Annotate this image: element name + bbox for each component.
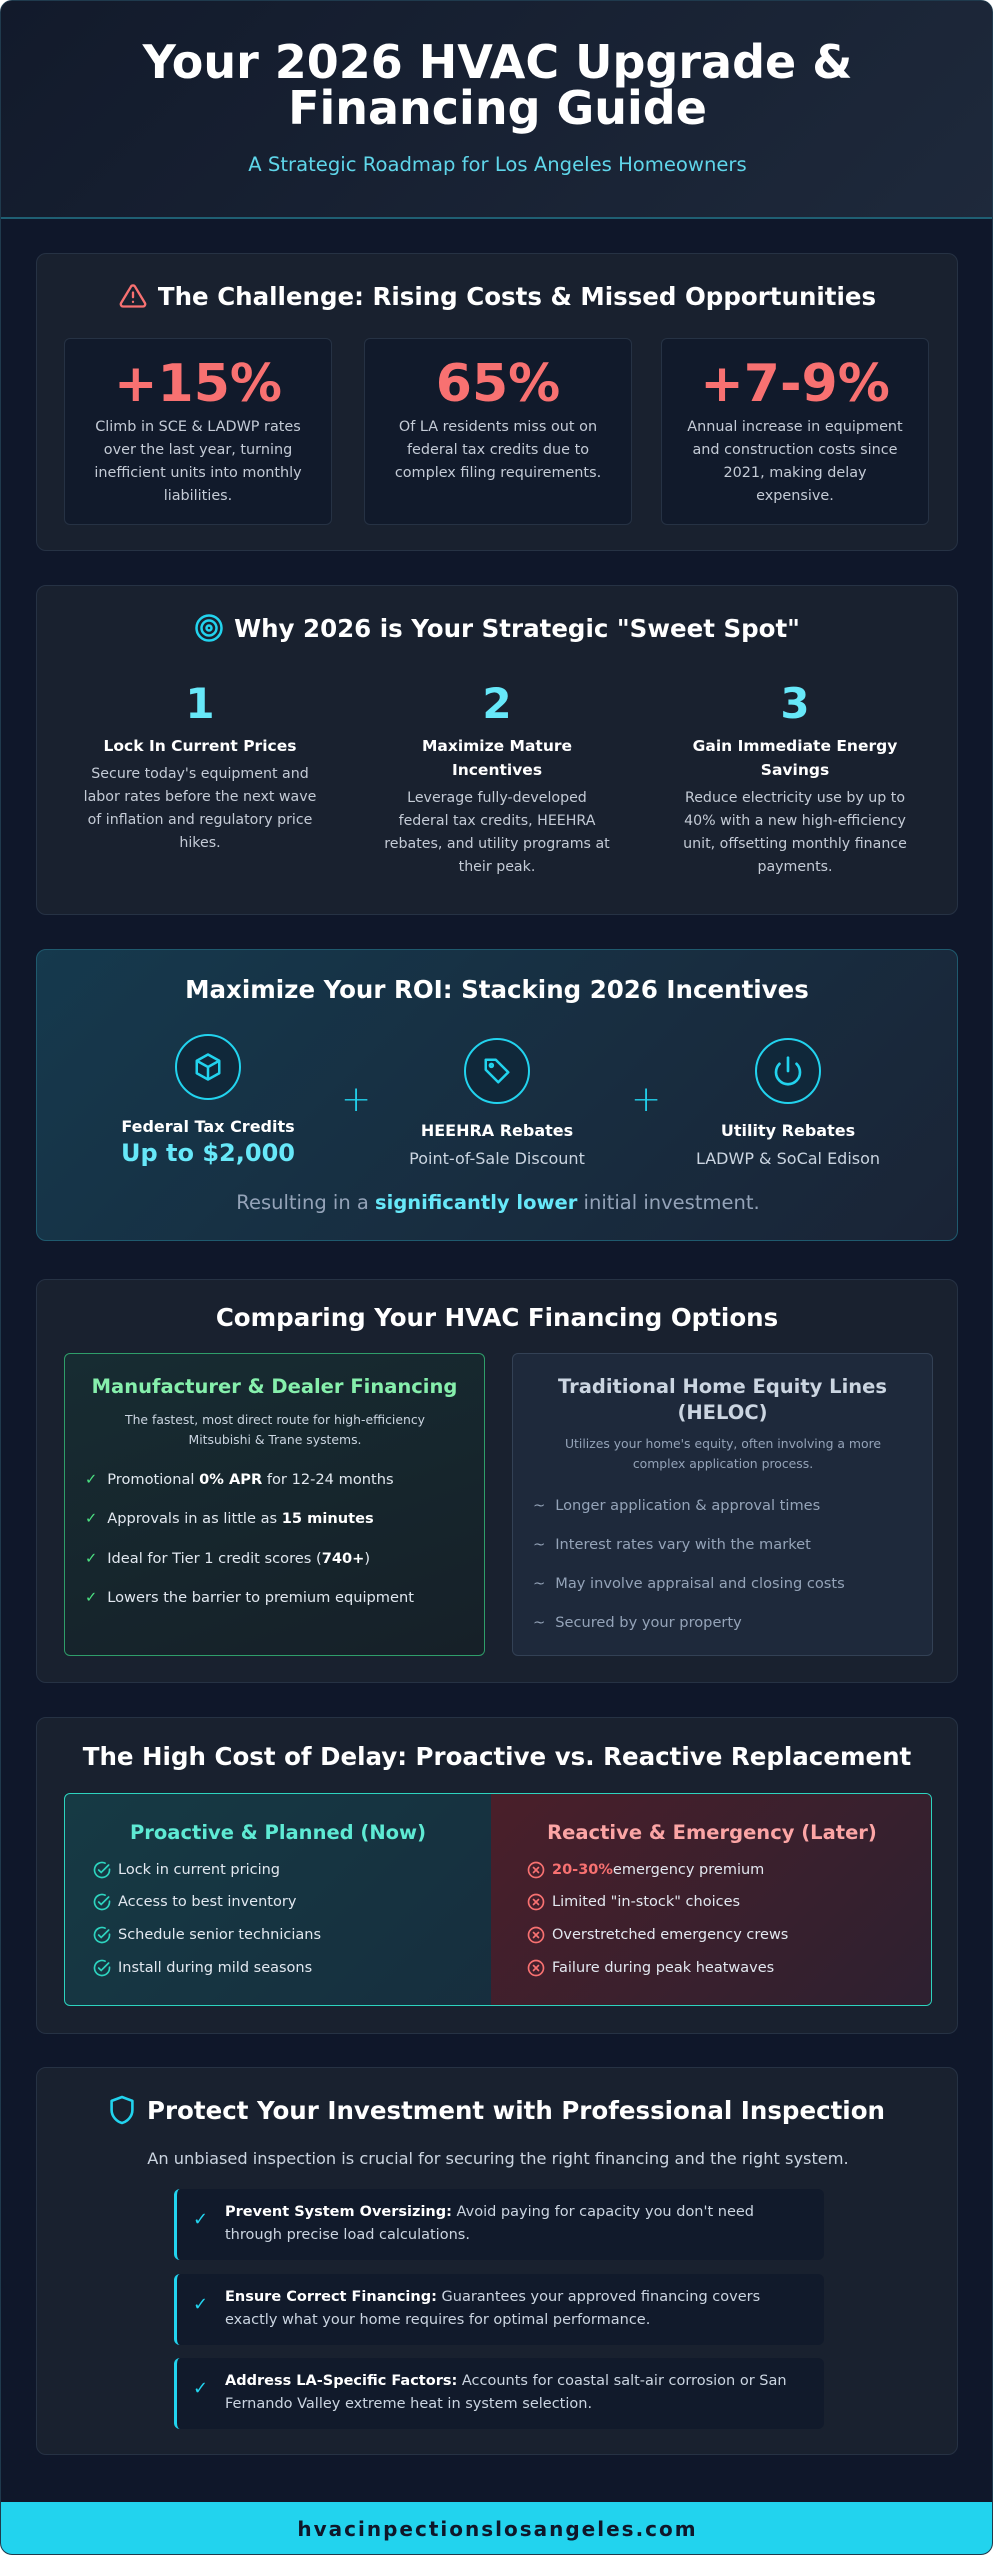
panel: financing options [36, 1279, 958, 1683]
incentive: utility: Utility Rebates [721, 1121, 855, 1140]
card: HELOC: ~ Secured by your property [533, 1614, 742, 1631]
heading: challenge: The Challenge: Rising Costs & Missed Opportunities [158, 282, 876, 311]
stat: +7-9%: +7-9% [700, 354, 890, 414]
item: LA factors: ✓ [193, 2378, 208, 2399]
item: oversizing: ✓ [193, 2209, 208, 2230]
incentive: HEEHRA: HEEHRA Rebates [421, 1121, 573, 1140]
title: Financing Guide [288, 81, 707, 135]
stat: +15%: Climb in SCE & LADWP rates over the last year, turning inefficient units into monthly liabilities. [94, 419, 302, 504]
reason 1: Lock In Current Prices [104, 737, 296, 755]
footer: hvacinpectionslosangeles.com [297, 2517, 698, 2541]
comparison box: Lock in current pricing [118, 1862, 280, 1878]
stat: 65%: 65% [436, 354, 560, 414]
comparison box [64, 1793, 932, 2006]
title [142, 35, 852, 135]
comparison box: Schedule senior technicians [118, 1927, 321, 1943]
card: dealer financing: ✓ Approvals in as little as 15 minutes [85, 1510, 374, 1527]
heading: delay: The High Cost of Delay: Proactive vs. Reactive Replacement [83, 1742, 911, 1771]
reason 2: Maximize Mature [422, 737, 572, 755]
subtitle: A Strategic Roadmap for Los Angeles Homeowners [248, 153, 747, 176]
stat: +7-9% [661, 338, 929, 525]
stat: +7-9%: Annual increase in equipment and construction costs since 2021, making delay expensive. [687, 419, 903, 504]
incentive: HEEHRA: Point-of-Sale Discount [409, 1149, 585, 1168]
item: financing: Ensure Correct Financing: Guarantees your approved financing covers exactly what your home requires for optimal performance. [225, 2289, 760, 2328]
item: financing: ✓ [193, 2294, 208, 2315]
header [1, 1, 994, 219]
item: oversizing: Prevent System Oversizing: Avoid paying for capacity you don't need through precise load calculations. [225, 2204, 754, 2243]
stat: 65% [364, 338, 632, 525]
item: oversizing [174, 2189, 824, 2260]
item: LA factors: Address LA-Specific Factors: Accounts for coastal salt-air corrosion or San Fernando Valley extreme heat in system selection. [225, 2373, 787, 2412]
stat: +15%: +15% [114, 354, 282, 414]
incentive: utility: LADWP & SoCal Edison [696, 1149, 880, 1168]
reason 1: 1 [185, 679, 215, 728]
result line: Resulting in a significantly lower initial investment. [236, 1191, 760, 1214]
title: Your 2026 HVAC Upgrade & [143, 35, 852, 89]
panel: challenge [36, 253, 958, 551]
stat: +15% [64, 338, 332, 525]
reason 3: Gain Immediate Energy [693, 737, 897, 755]
comparison box: Overstretched emergency crews [552, 1927, 788, 1943]
card: dealer financing: ✓ Ideal for Tier 1 credit scores (740+) [85, 1550, 370, 1567]
reason 2 [384, 679, 610, 875]
column: proactive: Proactive & Planned (Now) [130, 1821, 426, 1844]
reason 3: 3 [780, 679, 810, 728]
incentive: federal: Federal Tax Credits [121, 1117, 295, 1136]
panel: cost of delay [36, 1717, 958, 2034]
reason 2: Incentives [452, 761, 542, 779]
card: HELOC: Utilizes your home's equity, often involving a more complex application process. [565, 1436, 881, 1471]
card: dealer financing: Manufacturer & Dealer Financing [92, 1375, 457, 1398]
item: LA factors [174, 2358, 824, 2429]
bullets: ~ Longer application & approval times [533, 1497, 820, 1514]
card: HELOC: ~ May involve appraisal and closing costs [533, 1575, 845, 1592]
incentive: HEEHRA [409, 1038, 585, 1168]
heading: sweet spot: Why 2026 is Your Strategic "Sweet Spot" [234, 614, 800, 643]
reason 3: Reduce electricity use by up to 40% with a new high-efficiency unit, offsetting monthly finance payments. [683, 790, 907, 875]
comparison box: Limited "in-stock" choices [552, 1894, 740, 1910]
footer [1, 2502, 994, 2556]
incentive: federal [121, 1034, 295, 1167]
plus: + [631, 1079, 661, 1120]
incentive: federal: Up to $2,000 [121, 1139, 295, 1167]
column: reactive: Reactive & Emergency (Later) [547, 1821, 877, 1844]
comparison box: Install during mild seasons [118, 1960, 312, 1976]
heading: inspection: Protect Your Investment with Professional Inspection [147, 2096, 885, 2125]
card: dealer financing: ✓ Lowers the barrier to premium equipment [85, 1589, 414, 1606]
reason 2: rebates, and utility programs at [384, 836, 610, 852]
reason 1 [84, 679, 316, 851]
card: HELOC: Traditional Home Equity Lines [558, 1375, 887, 1398]
plus: + [341, 1079, 371, 1120]
reason 1: Secure today's equipment and labor rates before the next wave of inflation and regulatory price hikes. [84, 766, 316, 851]
panel: sweet spot [36, 585, 958, 915]
reason 2: Leverage fully-developed [407, 790, 587, 806]
incentive: utility [696, 1038, 880, 1168]
reason 2: 2 [482, 679, 512, 728]
bullets: ✓ Promotional 0% APR for 12-24 months [85, 1471, 394, 1488]
card: dealer financing: The fastest, most direct route for high-efficiency Mitsubishi & Trane systems. [125, 1412, 425, 1447]
comparison box: Failure during peak heatwaves [552, 1960, 774, 1976]
intro text: An unbiased inspection is crucial for securing the right financing and the right system. [147, 2149, 849, 2168]
reason 3: Savings [761, 761, 829, 779]
stat: 65%: Of LA residents miss out on federal tax credits due to complex filing requirements. [395, 419, 601, 481]
card: HELOC: (HELOC) [677, 1401, 768, 1424]
card: dealer financing [64, 1353, 485, 1656]
card: HELOC: ~ Interest rates vary with the market [533, 1536, 811, 1553]
heading: financing: Comparing Your HVAC Financing Options [216, 1303, 778, 1332]
card: HELOC [512, 1353, 933, 1656]
heading: ROI: Maximize Your ROI: Stacking 2026 Incentives [185, 975, 809, 1004]
comparison box: Access to best inventory [118, 1894, 296, 1910]
panel: inspection [36, 2067, 958, 2455]
reason 2: federal tax credits, HEEHRA [399, 813, 595, 829]
item: financing [174, 2274, 824, 2345]
reason 3 [683, 679, 907, 875]
reason 2: their peak. [459, 859, 535, 875]
comparison box: 20-30%emergency premium [552, 1862, 764, 1878]
panel: ROI incentives [36, 949, 958, 1241]
